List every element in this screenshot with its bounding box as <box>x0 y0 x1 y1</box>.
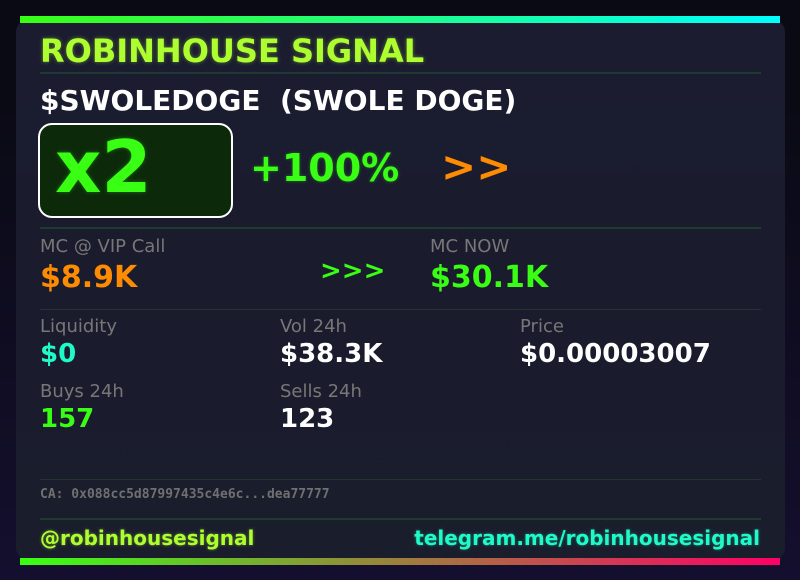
telegram link: telegram.me/robinhousesignal <box>414 526 760 550</box>
percent gain: +100% <box>250 146 399 190</box>
market cap arrows: >>> <box>320 256 385 286</box>
buys stat: Buys 24h <box>40 381 124 402</box>
handle: @robinhousesignal <box>40 526 254 550</box>
market cap now label: MC NOW <box>430 236 509 257</box>
token name: $SWOLEDOGE (SWOLE DOGE) <box>40 84 516 117</box>
price stat: $0.00003007 <box>520 339 711 369</box>
gain arrows: >> <box>441 142 511 191</box>
sells stat <box>280 381 362 434</box>
buys stat <box>40 381 124 434</box>
buys stat: 157 <box>40 404 94 434</box>
top gradient bar <box>20 16 780 23</box>
price stat <box>520 316 711 369</box>
multiplier value: x2 <box>55 125 152 209</box>
multiplier badge <box>38 123 233 218</box>
volume stat <box>280 316 384 369</box>
sells stat: Sells 24h <box>280 381 362 402</box>
liquidity stat: $0 <box>40 339 76 369</box>
volume stat: Vol 24h <box>280 316 347 337</box>
market cap at call label: MC @ VIP Call <box>40 236 165 257</box>
market cap at call value: $8.9K <box>40 260 137 295</box>
bottom gradient bar <box>20 558 780 565</box>
market cap now value: $30.1K <box>430 260 548 295</box>
liquidity stat <box>40 316 117 369</box>
liquidity stat: Liquidity <box>40 316 117 337</box>
title: ROBINHOUSE SIGNAL <box>40 32 424 70</box>
price stat: Price <box>520 316 564 337</box>
contract address: CA: 0x088cc5d87997435c4e6c...dea77777 <box>40 487 330 502</box>
sells stat: 123 <box>280 404 334 434</box>
volume stat: $38.3K <box>280 339 382 369</box>
